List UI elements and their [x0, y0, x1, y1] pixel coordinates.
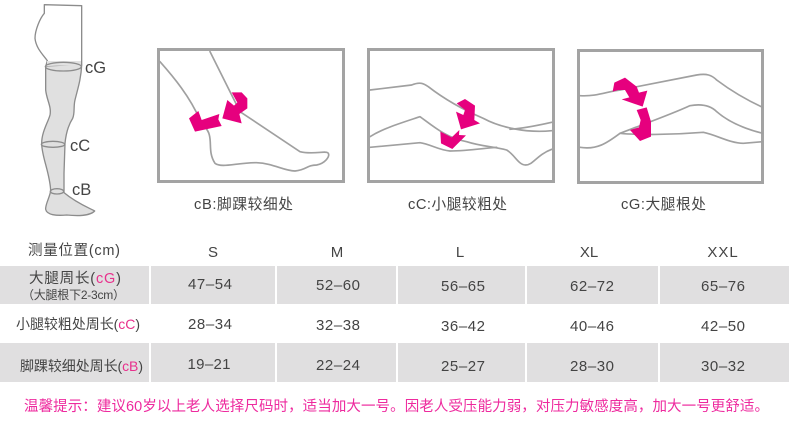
- header row: L: [456, 244, 464, 261]
- ankle frame: [158, 50, 344, 182]
- row: thigh cG: （大腿根下2-3cm）: [22, 288, 125, 302]
- row: calf cC: 32–38: [316, 317, 360, 334]
- row: thigh cG: 65–76: [701, 278, 745, 295]
- row: thigh cG: [0, 266, 789, 304]
- row: calf cC: 42–50: [701, 318, 745, 335]
- row: calf cC: 28–34: [188, 316, 232, 333]
- row: ankle cB: 22–24: [316, 357, 360, 374]
- row: ankle cB: [0, 343, 789, 382]
- row: thigh cG: 52–60: [316, 277, 360, 294]
- leg illustration: [35, 5, 95, 216]
- calf caption: cC:小腿较粗处: [408, 195, 507, 213]
- row: ankle cB: 脚踝较细处周长(cB): [20, 358, 143, 374]
- header row: XL: [580, 244, 598, 261]
- calf drawing: [370, 83, 552, 165]
- panel: ankle cB: [158, 50, 344, 213]
- row: ankle cB: 28–30: [570, 358, 614, 375]
- row: ankle cB: 30–32: [701, 358, 745, 375]
- row: calf cC: 小腿较粗处周长(cC): [16, 316, 140, 332]
- leg diagram: [35, 5, 106, 216]
- header row: [28, 242, 739, 261]
- calf frame: [368, 50, 554, 182]
- footer note: 温馨提示：建议60岁以上老人选择尺码时，适当加大一号。因老人受压能力弱，对压力敏感度高，加大一号更舒适。: [24, 398, 769, 415]
- header row: M: [331, 244, 343, 261]
- row: calf cC: 36–42: [441, 318, 485, 335]
- header row: XXL: [707, 244, 739, 261]
- size table: [0, 242, 789, 382]
- thigh drawing: [580, 74, 763, 148]
- thigh caption: cG:大腿根处: [621, 196, 706, 213]
- row: thigh cG: 47–54: [188, 276, 232, 293]
- header row: 测量位置(cm): [28, 242, 120, 259]
- row: thigh cG: 62–72: [570, 278, 614, 295]
- panel: calf cC: [368, 50, 554, 213]
- ankle drawing: [160, 52, 329, 171]
- row: ankle cB: 25–27: [441, 358, 485, 375]
- row: thigh cG: 56–65: [441, 278, 485, 295]
- row: ankle cB: 19–21: [188, 356, 230, 373]
- panel: thigh cG: [578, 50, 763, 213]
- header row: S: [208, 244, 218, 261]
- label cG: cG: [85, 59, 106, 77]
- label cC: cC: [70, 137, 90, 155]
- row: thigh cG: 大腿周长(cG): [29, 270, 121, 287]
- thigh frame: [578, 50, 762, 182]
- row: calf cC: [16, 316, 745, 335]
- label cB: cB: [72, 181, 91, 199]
- row: calf cC: 40–46: [570, 318, 614, 335]
- ankle caption: cB:脚踝较细处: [194, 195, 293, 213]
